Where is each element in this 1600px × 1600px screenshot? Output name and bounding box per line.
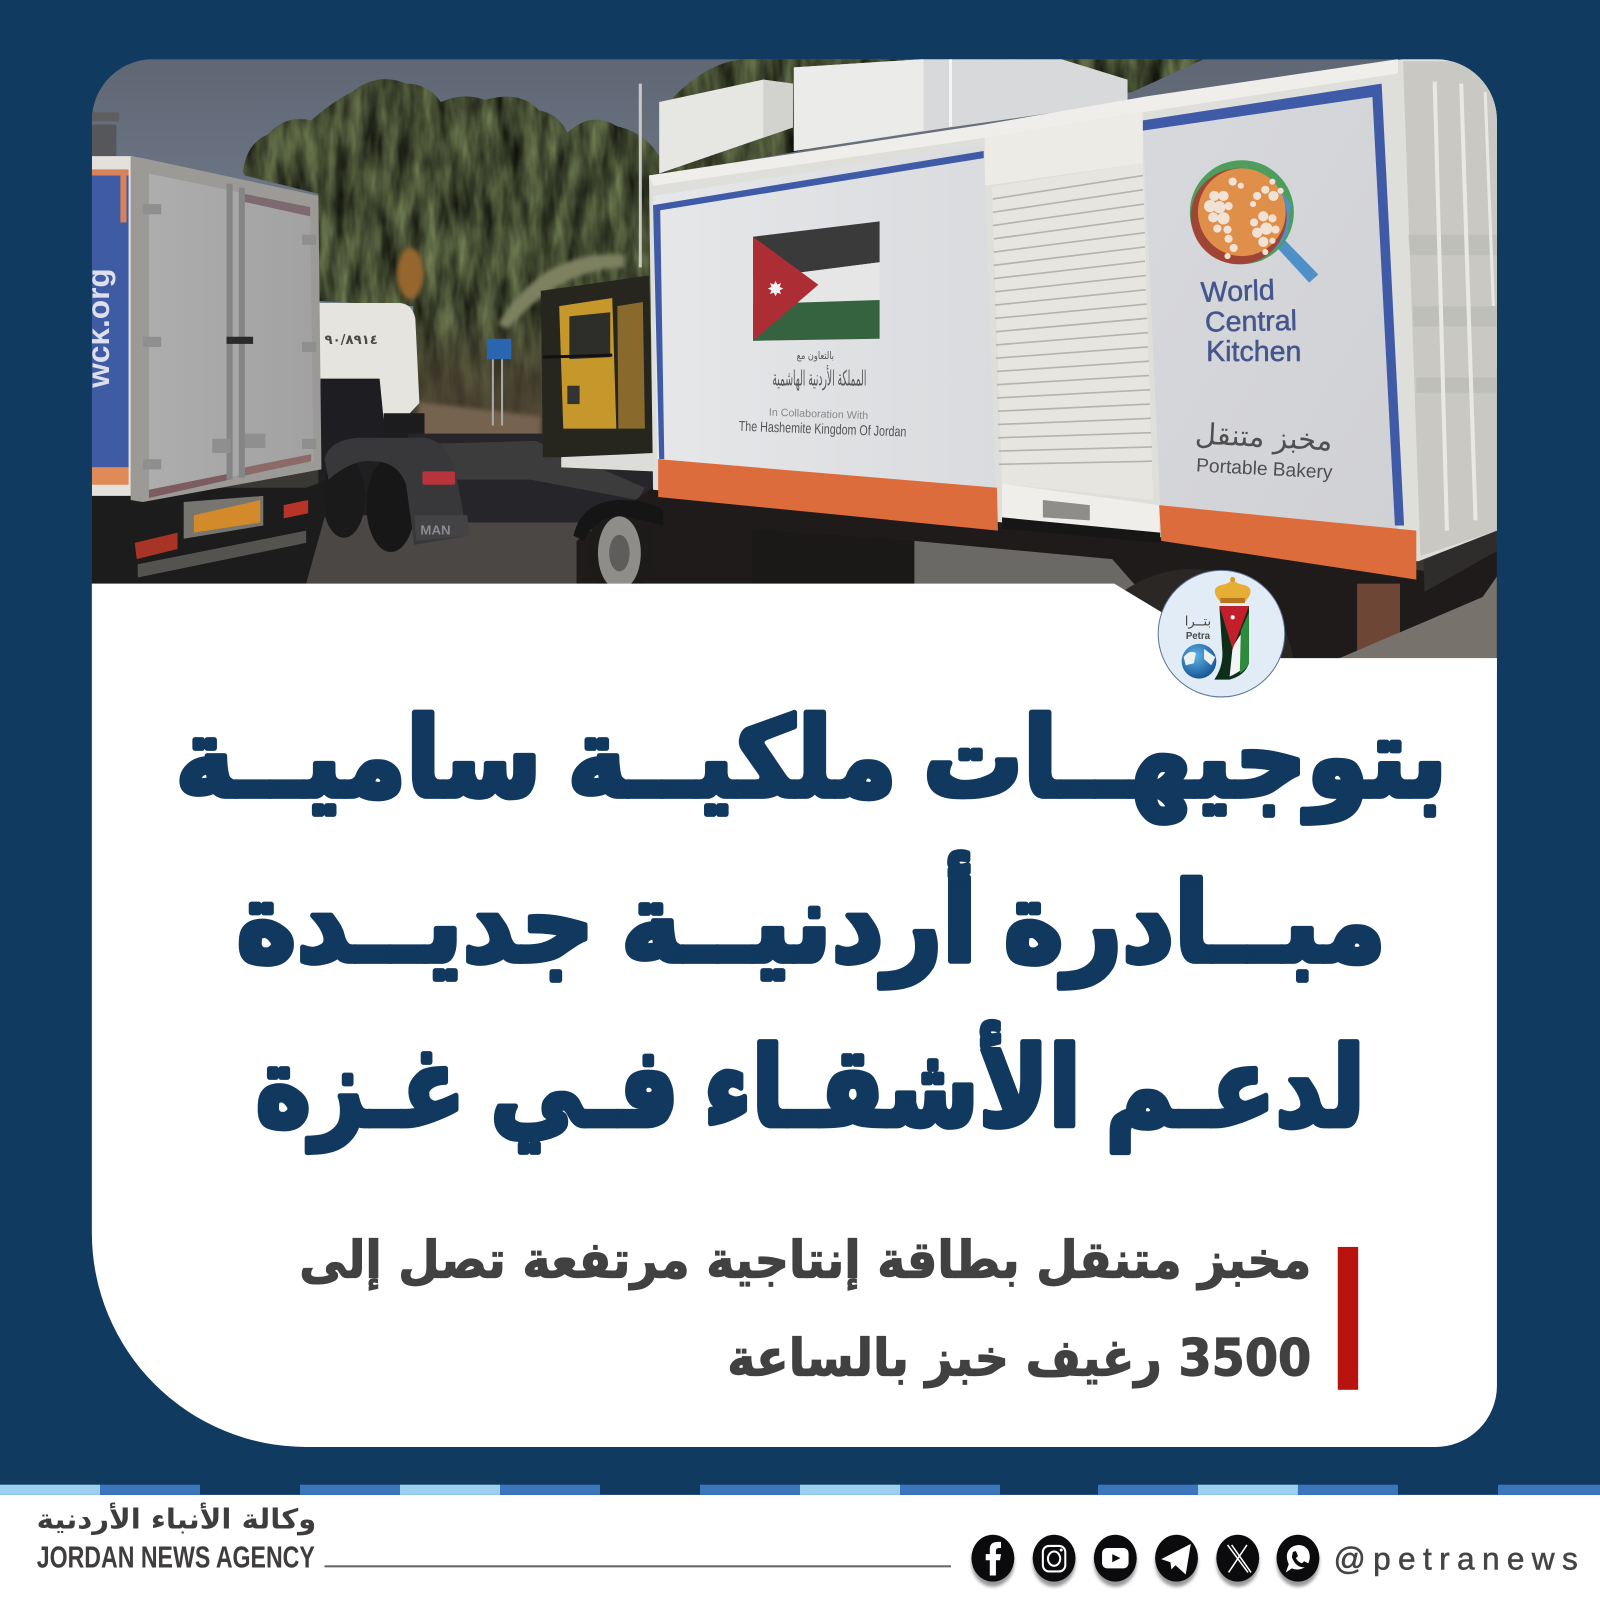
road	[306, 516, 592, 584]
collaboration text: بالتعاون مع	[797, 350, 834, 362]
icon: x	[1216, 1535, 1259, 1587]
globe	[1182, 644, 1216, 679]
orange bands	[658, 459, 998, 531]
portable bakery text	[1196, 422, 1332, 482]
sky	[92, 59, 1497, 312]
Jordan flag	[753, 221, 880, 341]
World Central Kitchen text: World	[1200, 274, 1275, 309]
distant ground	[418, 402, 541, 437]
Petra text: بتــرا	[1185, 615, 1211, 630]
Petra logo badge	[1158, 570, 1285, 697]
container body	[649, 59, 1497, 580]
agency name english: JORDAN NEWS AGENCY	[37, 1539, 315, 1574]
portable bakery text: Portable Bakery	[1196, 455, 1333, 484]
Petra text	[1185, 615, 1211, 642]
left truck: wck.org	[80, 268, 116, 389]
title: مبــادرة أردنيــة جديــدة	[237, 852, 1386, 988]
collaboration text: المملكة الأردنية الهاشمية	[772, 365, 866, 392]
collaboration text	[739, 350, 907, 440]
Petra text: Petra	[1186, 631, 1211, 642]
photo: portable bakery truck	[80, 51, 1497, 682]
social icons	[971, 1535, 1319, 1587]
social handle: @petranews	[1334, 1540, 1585, 1576]
tractor chassis and wheels: MAN	[420, 523, 451, 538]
tractor cab: ٩٠/٨٩١٤	[324, 333, 378, 348]
icon: whatsapp	[1277, 1535, 1319, 1587]
blue road sign	[487, 339, 511, 426]
title	[175, 694, 1447, 1152]
generator in cage	[541, 276, 653, 471]
roof units	[639, 59, 1128, 267]
scene base	[220, 410, 1497, 576]
left truck	[80, 112, 327, 584]
World Central Kitchen text: Kitchen	[1206, 336, 1301, 368]
blue side with wck.org	[92, 156, 133, 496]
tractor chassis and wheels	[318, 434, 653, 552]
subtitle text: مخبز متنقل بطاقة إنتاجية مرتفعة تصل إلى	[299, 1230, 1311, 1290]
icon: facebook	[971, 1535, 1014, 1587]
crown	[1215, 577, 1251, 603]
title: لدعـم الأشقـاء فـي غـزة	[256, 1021, 1365, 1152]
collaboration text: In Collaboration With	[769, 407, 868, 422]
subtitle text: 3500 رغيف خبز بالساعة	[727, 1328, 1311, 1388]
World Central Kitchen text: Central	[1205, 305, 1297, 339]
footer rule	[324, 1565, 951, 1567]
collaboration text: The Hashemite Kingdom Of Jordan	[739, 418, 907, 440]
shutter	[992, 163, 1159, 533]
agency name arabic: وكالة الأنباء الأردنية	[37, 1502, 316, 1535]
subtitle text	[299, 1230, 1311, 1388]
portable bakery text: مخبز متنقل	[1194, 416, 1333, 458]
footer white band	[0, 1495, 1600, 1600]
tractor cab	[318, 303, 424, 441]
World Central Kitchen text	[1200, 278, 1300, 362]
flag shield	[1214, 606, 1249, 680]
rear doors	[131, 156, 321, 502]
footer stripe	[0, 1485, 1600, 1495]
trees	[235, 51, 1214, 439]
Jordan flag: ✸	[767, 279, 784, 301]
title: بتوجيهــات ملكيــة ساميــة	[175, 694, 1447, 823]
red accent bar	[1338, 1247, 1358, 1390]
exhaust stack	[92, 124, 116, 156]
white content panel	[92, 584, 1497, 1447]
chassis	[92, 482, 327, 584]
icon: telegram	[1155, 1535, 1198, 1587]
World Central Kitchen logo	[1190, 160, 1318, 283]
container chassis and rear wheels	[573, 488, 1497, 673]
icon: youtube	[1094, 1535, 1137, 1587]
icon: instagram	[1033, 1535, 1076, 1587]
